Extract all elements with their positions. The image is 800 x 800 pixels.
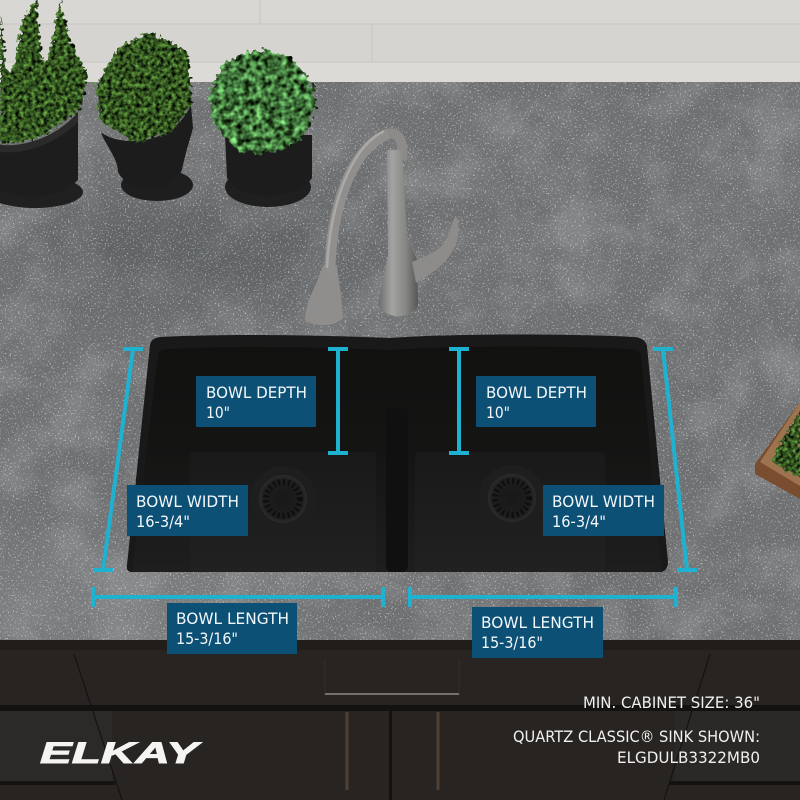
left bowl floor [190, 452, 376, 572]
text: sink model shown: ELGDULB3322MB0 [617, 748, 760, 767]
right drain [479, 465, 545, 531]
drawer handle [325, 660, 459, 694]
label: right bowl width: BOWL WIDTH [552, 492, 655, 511]
foliage: ivy ball [210, 50, 314, 154]
centre divider [386, 408, 408, 572]
left drain [250, 466, 316, 532]
right bowl width dimension line [653, 349, 697, 570]
label: left bowl depth [196, 376, 316, 427]
right bowl floor [415, 452, 605, 572]
label: left bowl length: BOWL LENGTH [176, 609, 289, 628]
right door handle [436, 712, 440, 790]
label: left bowl width: 16-3/4" [136, 512, 190, 531]
sink: double bowl [127, 334, 668, 572]
plant pot: parsley [96, 32, 193, 201]
text: sink model shown [513, 727, 760, 767]
right bowl length dimension line [410, 587, 676, 607]
text: minimum cabinet size: MIN. CABINET SIZE: 36" [583, 693, 760, 712]
faucet [305, 131, 458, 325]
label: right bowl depth: BOWL DEPTH [486, 383, 587, 402]
left bowl length dimension line [93, 587, 383, 607]
left bowl depth dimension line [328, 349, 348, 453]
cabinets [0, 640, 800, 800]
foliage: parsley [96, 32, 192, 143]
left bowl width dimension line [93, 349, 143, 570]
label: left bowl width [127, 485, 248, 536]
label: right bowl depth [476, 376, 596, 427]
text: sink model shown: QUARTZ CLASSIC® SINK SHOWN: [513, 727, 760, 746]
background: light wood floor [0, 0, 800, 82]
cutting board with herbs [755, 402, 800, 499]
countertop: speckled grey stone [0, 82, 800, 660]
label: right bowl length [472, 607, 603, 658]
label: right bowl width: 16-3/4" [552, 512, 606, 531]
foliage: rosemary stems [0, 0, 88, 145]
label: left bowl width: BOWL WIDTH [136, 492, 239, 511]
plant pot: ivy [210, 50, 314, 207]
label: left bowl length [167, 603, 297, 654]
label: left bowl depth: BOWL DEPTH [206, 383, 307, 402]
left door handle [346, 712, 348, 790]
label: left bowl length: 15-3/16" [176, 629, 238, 648]
plant pot: rosemary [0, 0, 88, 208]
label: left bowl depth: 10" [206, 403, 230, 422]
right bowl depth dimension line [449, 349, 469, 453]
label: right bowl width [543, 485, 664, 536]
label: right bowl length: BOWL LENGTH [481, 613, 594, 632]
logo: Elkay: ELKAY [40, 737, 203, 770]
label: right bowl length: 15-3/16" [481, 633, 543, 652]
label: right bowl depth: 10" [486, 403, 510, 422]
